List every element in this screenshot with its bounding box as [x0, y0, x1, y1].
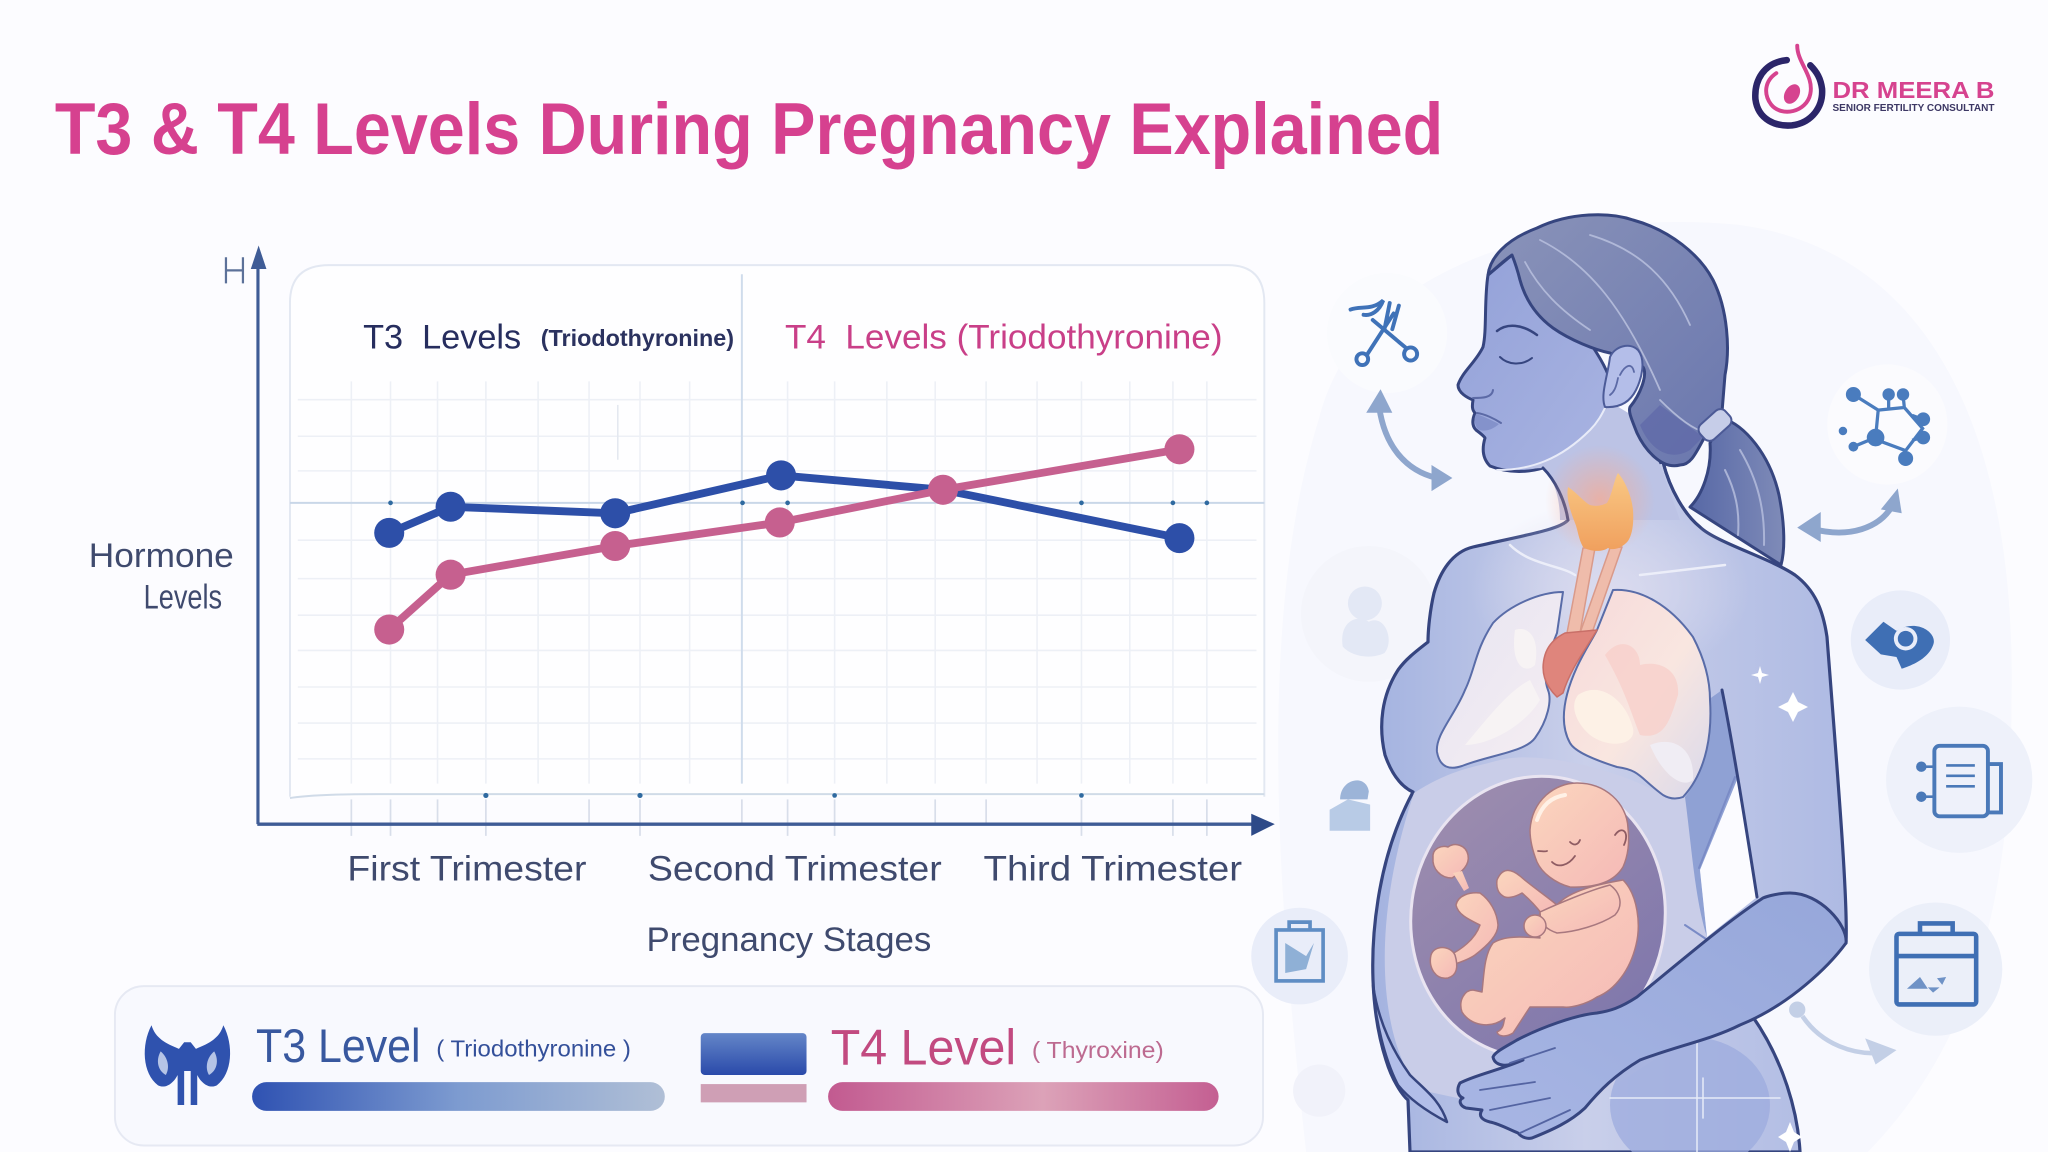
arrow: case [1791, 1004, 1896, 1064]
womb [1393, 760, 1683, 1074]
icon: medical tools [1351, 300, 1417, 365]
belly overlay [1385, 757, 1748, 1120]
icon: faint figure [1342, 586, 1389, 657]
illustration: pregnant woman with icons [1251, 215, 2032, 1152]
right lung [1564, 590, 1710, 798]
fetus [1430, 783, 1638, 1036]
T3 legend label [256, 1019, 631, 1072]
line chart [89, 246, 1275, 959]
x axis labels: First Trimester [347, 849, 587, 888]
stray limbs [1430, 845, 1498, 978]
arrow: molecule [1797, 488, 1902, 542]
T4 legend label: ( Thyroxine) [1032, 1037, 1164, 1063]
second hand [1373, 985, 1447, 1122]
thyroid [1567, 473, 1633, 551]
head [1530, 783, 1629, 887]
background halo [1278, 222, 2012, 1152]
x axis [257, 814, 1275, 836]
chart panel [290, 265, 1264, 797]
logo mark [1755, 46, 1822, 126]
airway strips [1567, 547, 1622, 633]
pale chest shading [1470, 500, 1750, 680]
arrow: tools [1366, 389, 1452, 491]
T3 legend bar [252, 1082, 665, 1111]
collar lines [1510, 545, 1725, 575]
T4 legend label: T4 Level [831, 1019, 1016, 1075]
series heading: T3: T3 Levels [363, 319, 521, 357]
y axis label [89, 537, 234, 617]
legend panel [115, 986, 1263, 1145]
hair tie [1696, 406, 1734, 444]
ponytail [1690, 418, 1784, 565]
x axis labels: Second Trimester [648, 849, 942, 888]
icon: case [1896, 923, 1976, 1004]
left lung [1437, 592, 1563, 768]
near leg and body [1461, 880, 1638, 1036]
pink swatch [701, 1084, 807, 1102]
logo: Dr Meera B [1755, 46, 1994, 126]
ear [1603, 346, 1642, 407]
series heading: T4: T4 Levels (Triodothyronine) [785, 319, 1223, 357]
x axis labels: Third Trimester [984, 849, 1242, 888]
T4 line [374, 434, 1194, 645]
heart [1543, 630, 1597, 697]
blue swatch [701, 1033, 807, 1075]
woman figure [1373, 215, 1846, 1152]
title: T3 & T4 Levels During Pregnancy Explained [55, 89, 1443, 170]
lower body shading [1610, 1037, 1770, 1152]
T3 line [374, 460, 1194, 553]
far arm [1497, 870, 1557, 914]
near arm [1540, 885, 1620, 933]
icon: molecule [1840, 389, 1928, 464]
icon bubbles [1251, 273, 2032, 1117]
T3 legend label: T3 Level [256, 1019, 421, 1072]
side band [1685, 690, 1737, 937]
icon: thyroid [145, 1025, 230, 1105]
forearm and hand [1458, 893, 1846, 1138]
series heading: T3 [363, 319, 734, 357]
x axis labels [347, 849, 1242, 888]
T4 legend label [831, 1019, 1164, 1075]
icon: document [1918, 746, 2001, 816]
icon: gland [1865, 622, 1934, 669]
logo subtitle: SENIOR FERTILITY CONSULTANT [1832, 103, 1994, 114]
y axis label: Hormone [89, 537, 234, 575]
T3 legend label: ( Triodothyronine ) [436, 1036, 631, 1062]
T4 legend bar [828, 1082, 1219, 1111]
face details [1473, 326, 1537, 431]
icon: clipboard [1276, 922, 1323, 981]
thyroid glow [1545, 445, 1655, 555]
x axis title: Pregnancy Stages [647, 921, 931, 959]
sparkles [1751, 666, 1808, 1152]
icon: faint box [1330, 780, 1370, 831]
gap between arm and torso [1700, 780, 1757, 937]
y axis [226, 246, 266, 824]
body silhouette [1373, 462, 1846, 1152]
series heading: T3: (Triodothyronine) [541, 325, 734, 351]
y axis label: Levels [144, 579, 222, 617]
hair [1488, 215, 1727, 466]
jaw to neck [1497, 402, 1680, 520]
neck and face [1458, 255, 1612, 472]
logo name: DR MEERA B [1832, 77, 1994, 103]
